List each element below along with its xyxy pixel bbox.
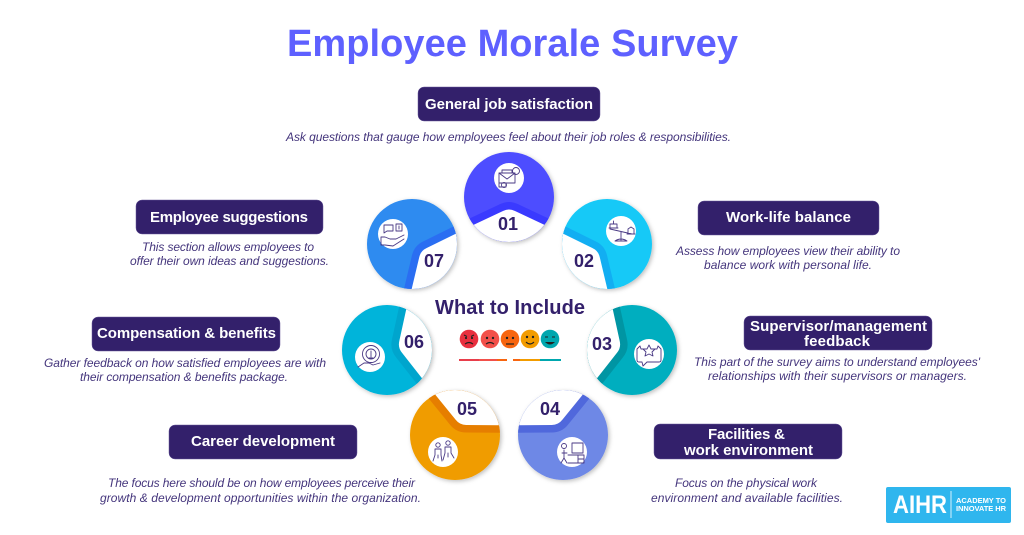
disc 02 xyxy=(561,198,656,293)
icon: two people climbing xyxy=(428,437,458,467)
number 02: 02 xyxy=(574,251,594,271)
heading pill xyxy=(136,200,323,234)
heading pill xyxy=(698,201,879,235)
centre heading: What to Include xyxy=(435,297,585,319)
mood scale bar xyxy=(459,359,561,361)
description xyxy=(130,240,329,268)
icon: hand holding badge xyxy=(355,342,385,372)
icon: office desk and chair xyxy=(557,437,587,467)
heading pill: Employee suggestions xyxy=(150,209,308,226)
panel: general job satisfaction xyxy=(285,87,731,144)
heading pill: work environment xyxy=(683,442,813,459)
panel: facilities and work environment xyxy=(651,424,843,505)
description: Gather feedback on how satisfied employees are with xyxy=(44,356,326,370)
logo: AIHR: ACADEMY TO xyxy=(956,496,1006,505)
disc 01 xyxy=(464,152,554,257)
disc 06 xyxy=(341,304,436,399)
icon: delighted face xyxy=(541,330,559,348)
heading pill xyxy=(744,316,932,350)
description: offer their own ideas and suggestions. xyxy=(130,254,329,268)
heading pill xyxy=(92,317,280,351)
description xyxy=(100,476,421,505)
icon: sad face xyxy=(481,330,499,348)
title: Employee Morale Survey xyxy=(287,23,738,65)
disc 05 xyxy=(409,389,504,484)
disc 07 xyxy=(366,198,461,293)
description: environment and available facilities. xyxy=(651,491,843,505)
icon: smiling face xyxy=(521,330,539,348)
icon: angry face xyxy=(460,330,478,348)
number 03: 03 xyxy=(592,334,612,354)
description: This section allows employees to xyxy=(142,240,314,254)
description xyxy=(44,356,326,384)
description: balance work with personal life. xyxy=(704,258,872,272)
description xyxy=(675,244,900,272)
logo: AIHR: AIHR xyxy=(893,491,947,519)
heading pill: Career development xyxy=(191,433,335,450)
logo: AIHR: INNOVATE HR xyxy=(956,504,1007,513)
heading pill xyxy=(654,424,842,459)
description: Ask questions that gauge how employees feel about their job roles & responsibilities. xyxy=(285,130,731,144)
heading pill: Facilities & xyxy=(708,426,785,443)
heading pill: General job satisfaction xyxy=(425,96,593,113)
description: Focus on the physical work xyxy=(675,476,818,490)
disc 03 xyxy=(586,304,681,399)
icon: neutral face xyxy=(501,330,519,348)
mood faces xyxy=(460,330,559,348)
heading pill xyxy=(418,87,600,121)
heading pill: Supervisor/management xyxy=(750,318,927,335)
number 01: 01 xyxy=(498,214,518,234)
icon: star rating speech bubble xyxy=(634,339,664,369)
description xyxy=(694,355,981,383)
heading pill: feedback xyxy=(804,333,871,350)
logo: AIHR xyxy=(886,487,1011,523)
heading pill: Compensation & benefits xyxy=(97,325,276,342)
disc 04 xyxy=(517,389,612,484)
icon: briefcase with person xyxy=(494,163,524,193)
panel: work-life balance xyxy=(675,201,900,272)
heading pill xyxy=(169,425,357,459)
panel: supervisor/management feedback xyxy=(694,316,981,383)
panel: career development xyxy=(100,425,421,505)
description: relationships with their supervisors or managers. xyxy=(708,369,967,383)
icon: hand with speech bubble xyxy=(378,219,408,249)
description: The focus here should be on how employees perceive their xyxy=(108,476,416,490)
description: This part of the survey aims to understand employees' xyxy=(694,355,981,369)
description: growth & development opportunities within the organization. xyxy=(100,491,421,505)
number 04: 04 xyxy=(540,399,560,419)
number 06: 06 xyxy=(404,332,424,352)
number 07: 07 xyxy=(424,251,444,271)
panel: compensation and benefits xyxy=(44,317,326,384)
description: their compensation & benefits package. xyxy=(80,370,288,384)
heading pill: Work-life balance xyxy=(726,209,851,226)
description: Assess how employees view their ability to xyxy=(675,244,900,258)
panel: employee suggestions xyxy=(130,200,329,268)
description xyxy=(651,476,843,505)
number 05: 05 xyxy=(457,399,477,419)
icon: balance scale xyxy=(606,216,636,246)
